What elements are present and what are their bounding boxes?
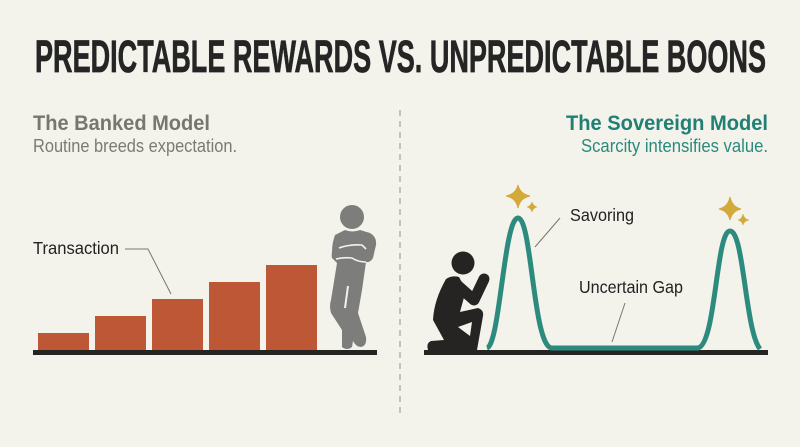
subheading: routine breeds expectation: Routine breeds expectation.	[33, 135, 237, 156]
leader line: uncertain gap	[612, 303, 625, 342]
chart: peaks and gap curve	[487, 218, 760, 349]
heading: the banked model: The Banked Model	[33, 112, 210, 135]
heading: the sovereign model: The Sovereign Model	[566, 112, 768, 135]
panel: sovereign model	[424, 112, 768, 355]
bar chart: rising bars	[38, 265, 317, 351]
leader line: transaction	[125, 249, 171, 294]
icon: kneeling person	[427, 252, 484, 350]
leader line: savoring	[535, 218, 560, 247]
label: transaction: Transaction	[33, 238, 119, 258]
label: uncertain gap: Uncertain Gap	[579, 277, 683, 297]
subheading: scarcity intensifies value: Scarcity intensifies value.	[581, 135, 768, 156]
baseline: right	[424, 350, 768, 355]
label: savoring: Savoring	[570, 205, 634, 225]
baseline: left	[33, 350, 377, 355]
icon: leaning person with crossed arms	[330, 205, 376, 349]
icon: sparkles right	[719, 197, 749, 225]
icon: sparkles left	[506, 185, 537, 212]
panel: banked model	[33, 112, 377, 355]
